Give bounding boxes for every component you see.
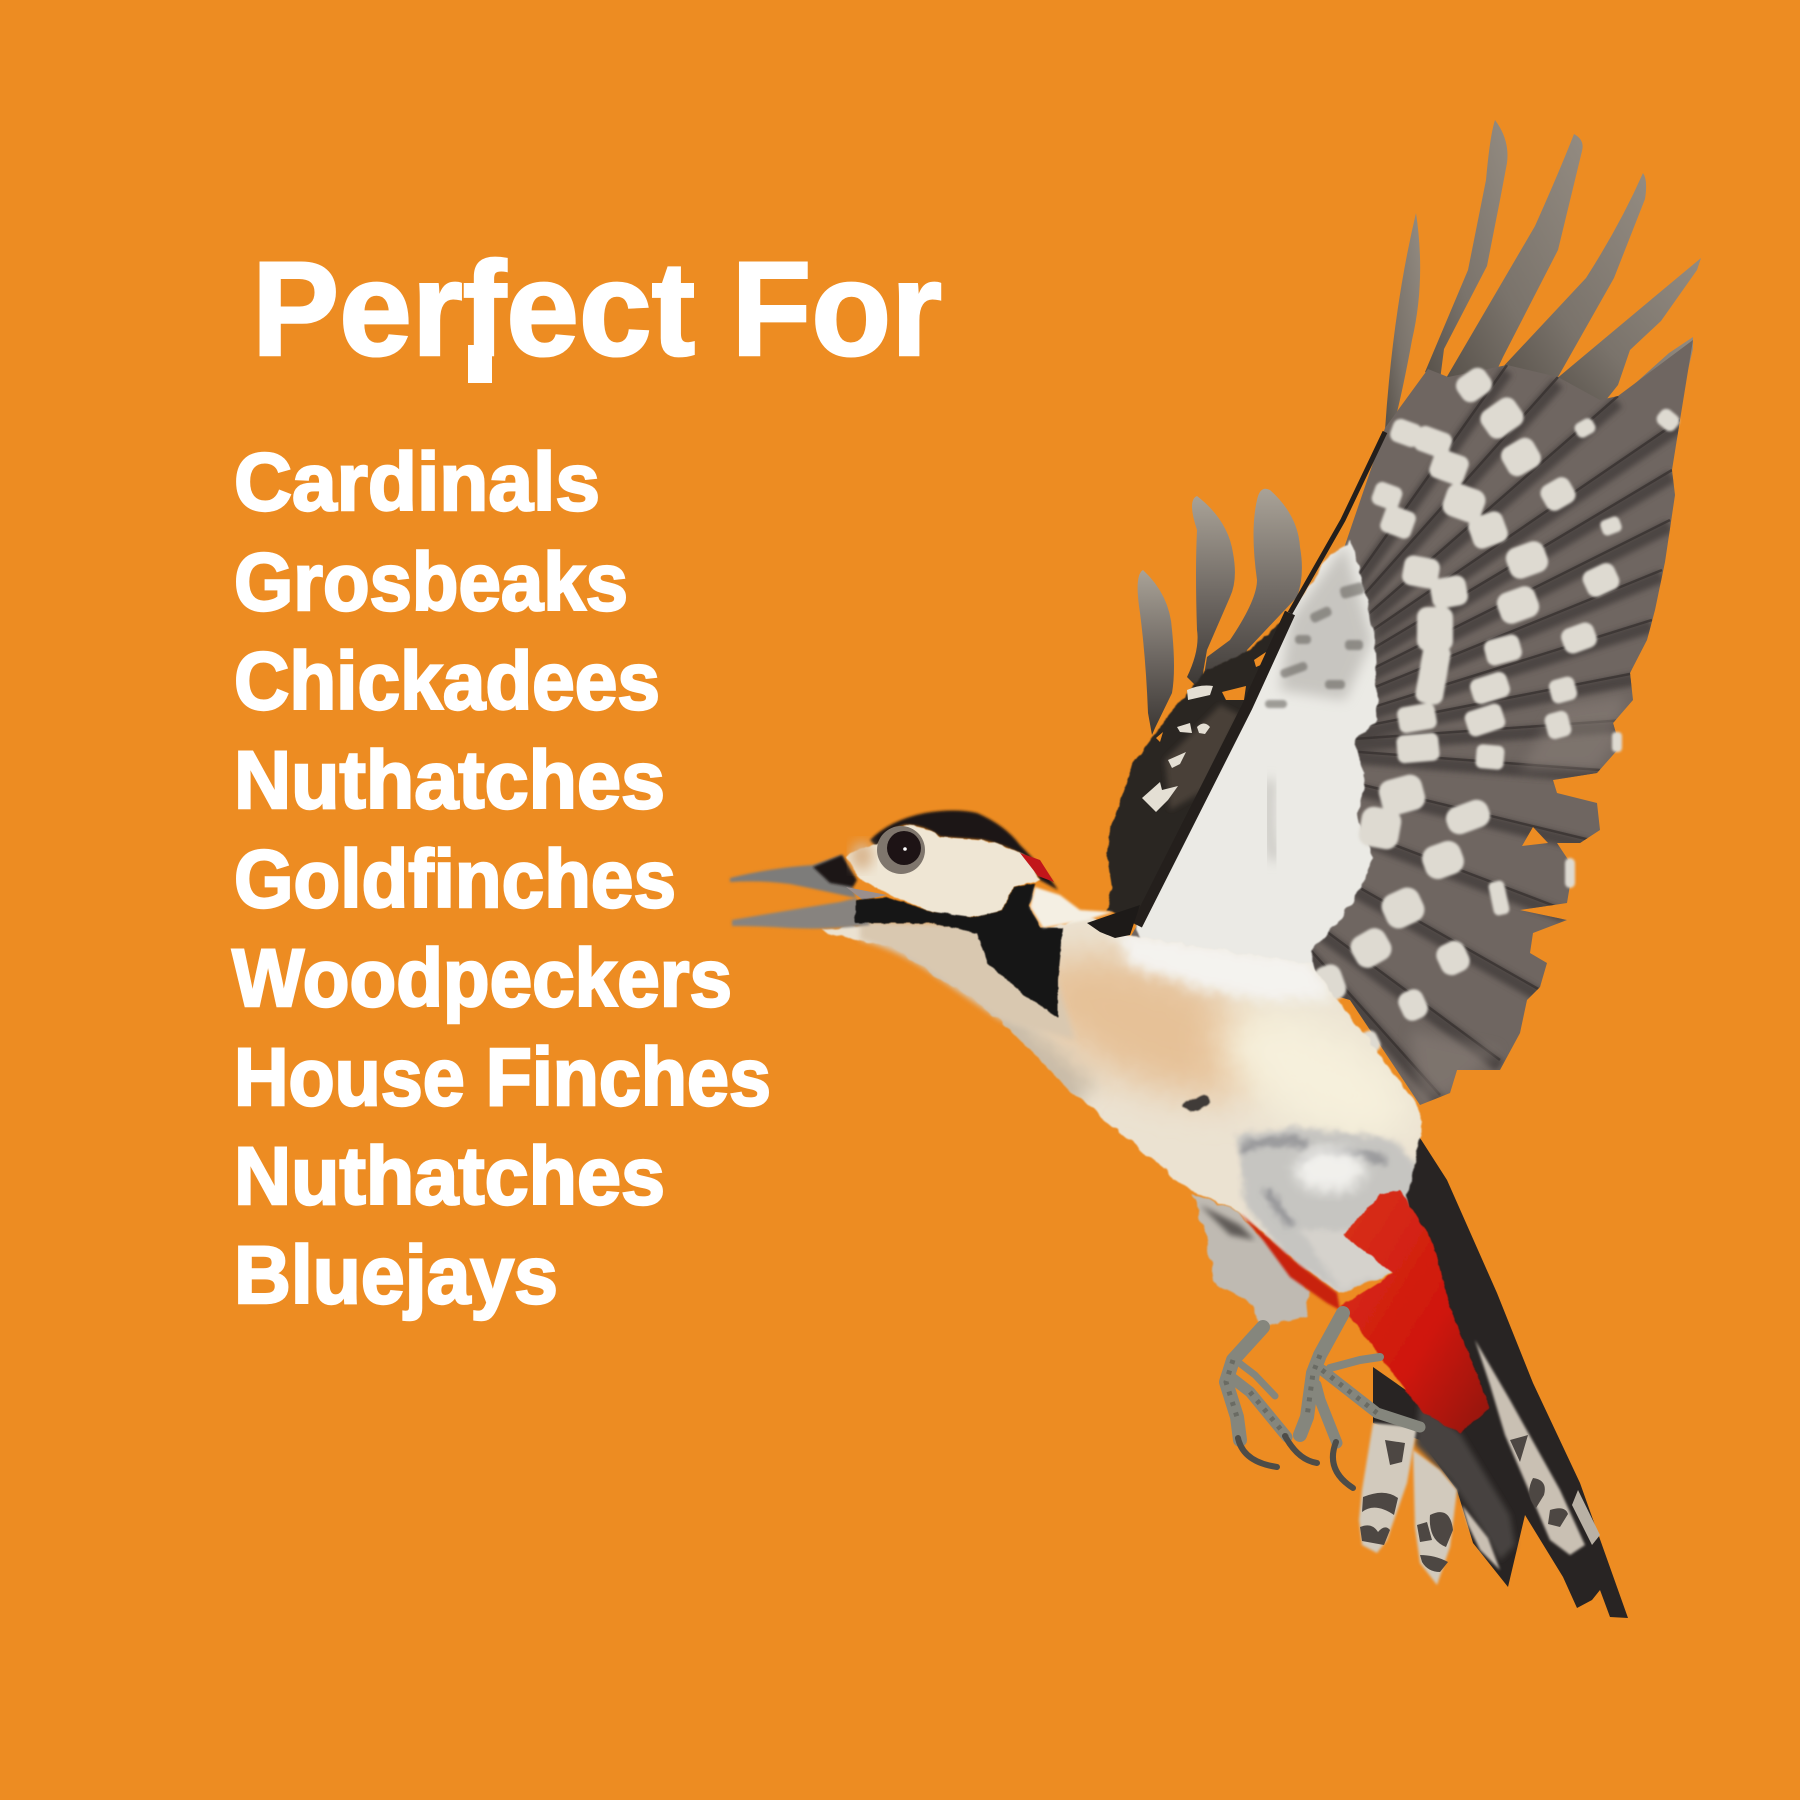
tail: pale streak: [1572, 1490, 1600, 1545]
list item: Cardinals: Cardinals: [234, 437, 600, 528]
left leg: [1226, 1327, 1317, 1467]
upper beak: [730, 855, 856, 898]
grey lower belly: [1237, 1127, 1420, 1293]
pale lower lobe: [1300, 1230, 1393, 1290]
rear wing brown shading: [1165, 705, 1240, 810]
beige underside: [880, 950, 1080, 1100]
head: [730, 810, 1140, 1040]
lower beak: [732, 898, 870, 929]
belly mark: [1183, 1093, 1211, 1113]
wing gap: [1522, 827, 1548, 846]
beak base: [813, 855, 857, 887]
cream belly: [1202, 1003, 1403, 1134]
right leg: [1300, 1313, 1420, 1488]
tail: centre grey: [1415, 1400, 1515, 1560]
list item: House Finches: House Finches: [234, 1032, 771, 1123]
rear wing dark coverts: [1107, 613, 1295, 925]
neck base: [860, 920, 1075, 1040]
lower feather tips pale: [1410, 695, 1625, 1105]
red nape: [1020, 853, 1054, 882]
primary feather tips: [1385, 120, 1701, 450]
list item: Chickadees: Chickadees: [234, 636, 660, 727]
rear wing feathers: [1107, 489, 1302, 925]
gape: [846, 887, 887, 900]
body layers clipped to outline: [822, 917, 1423, 1294]
list item: Grosbeaks: Grosbeaks: [234, 537, 628, 628]
red vent: [1340, 1190, 1490, 1433]
list item: Bluejays: Bluejays: [234, 1230, 558, 1321]
wing base: [1131, 340, 1693, 1105]
body: [822, 917, 1423, 1294]
feather shafts: [1311, 365, 1680, 1096]
list item: Nuthatches: Nuthatches: [234, 735, 665, 826]
species list: [232, 437, 771, 1321]
list item: Nuthatches: Nuthatches: [234, 1131, 665, 1222]
eye: [877, 826, 925, 874]
pale underwing: [1137, 540, 1378, 985]
feather dark bands: [1312, 367, 1680, 1102]
underwing centre shading: [1268, 780, 1275, 860]
black shoulder: [1087, 905, 1140, 938]
cream face: [847, 825, 1040, 917]
list item: Woodpeckers: Woodpeckers: [232, 933, 732, 1024]
leading edge: [1137, 432, 1385, 925]
tan lores: [851, 842, 873, 870]
tail: [1359, 1127, 1628, 1618]
illustration: woodpecker in flight: [730, 120, 1720, 1618]
tail: dark underlay: [1373, 1127, 1628, 1618]
black cap: [870, 810, 1058, 890]
white chest: [1115, 930, 1335, 1000]
body base: [822, 917, 1423, 1294]
main wing: [1131, 120, 1701, 1105]
grey tuck on thigh: [1200, 1205, 1255, 1240]
underwing speckles: [1265, 582, 1365, 708]
white neck patch: [1030, 887, 1113, 928]
underwing grey top: [1280, 545, 1372, 700]
white wing spots: [1311, 364, 1682, 1056]
black malar and neck patch: [855, 883, 1063, 1017]
grey belly strokes: [1240, 1141, 1385, 1225]
tail feather: middle barred: [1413, 1450, 1457, 1585]
tail: outer barred feather: [1475, 1340, 1585, 1555]
left thigh: [1193, 1193, 1310, 1327]
white belly highlight: [1295, 1148, 1365, 1192]
lower red stripe: [1240, 1213, 1340, 1310]
tail feather: left barred: [1359, 1423, 1417, 1553]
wing feathers clipped to outline: [1131, 340, 1693, 1105]
tail feather: pale patch: [1462, 1505, 1500, 1570]
peach chest: [1040, 934, 1256, 1117]
legs and claws: [1226, 1313, 1420, 1488]
rear wing white marks and gaps: [1142, 652, 1266, 812]
list item: Goldfinches: Goldfinches: [234, 834, 676, 925]
title: Perfect For: [252, 235, 942, 384]
